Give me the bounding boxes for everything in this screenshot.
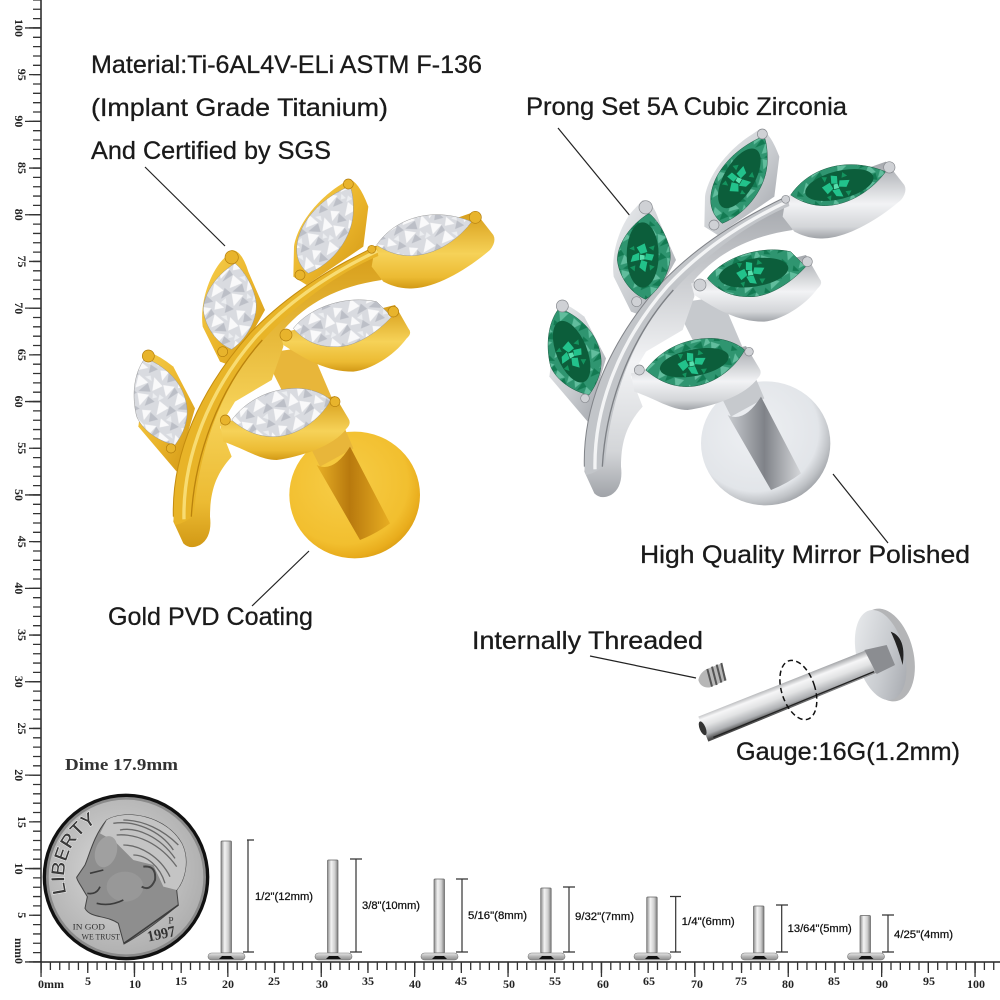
vertical ruler: 45 bbox=[15, 536, 29, 548]
material specification text: Material:Ti-6AL4V-ELi ASTM F-136 bbox=[91, 51, 482, 79]
silver left leaf settings bbox=[549, 129, 779, 422]
horizontal ruler: 15 bbox=[175, 974, 187, 988]
green marquise stones bbox=[548, 136, 886, 395]
threaded end bbox=[697, 720, 708, 736]
horizontal ruler bbox=[38, 962, 1000, 991]
labret post diagram bbox=[697, 602, 924, 742]
length sample 12mm: 1/2"(12mm) bbox=[255, 891, 313, 903]
horizontal ruler: 100 bbox=[967, 977, 985, 991]
horizontal ruler: 95 bbox=[923, 974, 935, 988]
vertical ruler: 55 bbox=[15, 442, 29, 454]
length sample 8mm bbox=[421, 879, 527, 960]
flat back disc bbox=[846, 602, 924, 708]
horizontal ruler: 70 bbox=[691, 977, 703, 991]
length sample 10mm: 3/8"(10mm) bbox=[362, 900, 420, 912]
liberty inscription bbox=[64, 823, 97, 893]
length sample 4mm: 4/25"(4mm) bbox=[894, 929, 953, 941]
threaded screw bbox=[698, 663, 727, 687]
gold leaf labret bbox=[134, 179, 494, 558]
leader line: threaded bbox=[590, 656, 696, 678]
silver ribbon behind stem bbox=[584, 197, 793, 497]
leader line: mirror polished bbox=[833, 474, 888, 543]
portrait bbox=[77, 815, 186, 944]
vertical ruler: 40 bbox=[12, 582, 26, 594]
collar bbox=[864, 645, 895, 674]
leader line: prong set bbox=[558, 128, 631, 217]
gold prongs bbox=[142, 179, 481, 453]
length sample 5mm: 13/64"(5mm) bbox=[788, 923, 852, 935]
length sample 8mm: 5/16"(8mm) bbox=[468, 910, 527, 922]
clear marquise stones bbox=[134, 186, 472, 445]
horizontal ruler: 0mm bbox=[38, 977, 64, 991]
vertical ruler: 15 bbox=[15, 816, 29, 828]
length sample 7mm: 9/32"(7mm) bbox=[575, 911, 634, 923]
horizontal ruler: 20 bbox=[222, 977, 234, 991]
vertical ruler: 10 bbox=[12, 863, 26, 875]
length sample 5mm bbox=[741, 905, 852, 960]
mirror polished label: High Quality Mirror Polished bbox=[640, 541, 970, 569]
mint mark: P bbox=[168, 916, 174, 926]
vertical ruler: 50 bbox=[12, 489, 26, 501]
horizontal ruler: 55 bbox=[549, 974, 561, 988]
material specification text bbox=[91, 51, 482, 165]
vertical ruler: 70 bbox=[12, 302, 26, 314]
dark stone centres bbox=[545, 142, 877, 388]
horizontal ruler: 25 bbox=[268, 974, 280, 988]
gold post bbox=[263, 347, 390, 540]
gold coating label: Gold PVD Coating bbox=[108, 603, 313, 631]
coin motto: WE TRUST bbox=[82, 932, 120, 941]
bright stone sparkles bbox=[554, 161, 853, 379]
vertical ruler: 20 bbox=[12, 769, 26, 781]
vertical ruler: 75 bbox=[15, 256, 29, 268]
horizontal ruler: 40 bbox=[409, 977, 421, 991]
horizontal ruler: 35 bbox=[362, 974, 374, 988]
horizontal ruler: 75 bbox=[735, 974, 747, 988]
dime caption: Dime 17.9mm bbox=[65, 755, 178, 774]
silver base disc bbox=[701, 381, 830, 505]
vertical ruler: 60 bbox=[12, 396, 26, 408]
vertical ruler: 90 bbox=[12, 115, 26, 127]
length sample 12mm bbox=[208, 840, 313, 960]
horizontal ruler: 80 bbox=[782, 977, 794, 991]
length sample 4mm bbox=[848, 915, 953, 960]
horizontal ruler: 10 bbox=[129, 977, 141, 991]
prong set label: Prong Set 5A Cubic Zirconia bbox=[526, 93, 847, 121]
material specification text: And Certified by SGS bbox=[91, 137, 331, 165]
vertical ruler: 100 bbox=[12, 19, 26, 37]
vertical ruler: mm0 bbox=[12, 938, 26, 964]
length sample 6mm: 1/4"(6mm) bbox=[682, 916, 735, 928]
gold right leaf settings bbox=[220, 212, 494, 460]
gold left leaf settings bbox=[138, 179, 368, 472]
vertical ruler: 65 bbox=[15, 349, 29, 361]
gauge dashed ring bbox=[773, 656, 824, 724]
material specification text: (Implant Grade Titanium) bbox=[91, 94, 388, 122]
vertical ruler: 85 bbox=[15, 162, 29, 174]
vertical ruler: 25 bbox=[15, 722, 29, 734]
horizontal ruler: 60 bbox=[597, 977, 609, 991]
coin motto: IN GOD bbox=[73, 922, 105, 931]
post shadow line bbox=[713, 672, 874, 737]
coin date: 1997 bbox=[146, 923, 177, 946]
vertical ruler bbox=[12, 0, 41, 964]
horizontal ruler: 50 bbox=[503, 977, 515, 991]
leader line: gold coating bbox=[252, 551, 309, 606]
silver right leaf settings bbox=[631, 162, 905, 410]
vertical ruler: 80 bbox=[12, 209, 26, 221]
coin motto bbox=[73, 922, 120, 941]
silver post bbox=[674, 297, 801, 490]
silver prongs bbox=[556, 129, 895, 403]
horizontal ruler: 90 bbox=[876, 977, 888, 991]
gold ribbon behind stem bbox=[173, 247, 382, 547]
dime coin bbox=[42, 794, 210, 960]
length sample 7mm bbox=[528, 887, 634, 960]
gold curved stem bbox=[173, 246, 378, 525]
horizontal ruler: 65 bbox=[643, 974, 655, 988]
silver leaf labret with green stones bbox=[545, 129, 905, 505]
gold base disc bbox=[289, 432, 420, 558]
post tube bbox=[698, 651, 877, 742]
gauge label: Gauge:16G(1.2mm) bbox=[736, 738, 960, 766]
internally threaded label: Internally Threaded bbox=[472, 627, 703, 655]
silver curved stem bbox=[584, 196, 789, 475]
length sample 10mm bbox=[315, 859, 420, 960]
vertical ruler: 35 bbox=[15, 629, 29, 641]
horizontal ruler: 30 bbox=[316, 977, 328, 991]
vertical ruler: 5 bbox=[15, 912, 29, 918]
length sample 6mm bbox=[634, 896, 735, 960]
horizontal ruler: 5 bbox=[85, 974, 91, 988]
vertical ruler: 95 bbox=[15, 69, 29, 81]
dime coin: LIBERTY bbox=[50, 810, 93, 895]
vertical ruler: 30 bbox=[12, 676, 26, 688]
horizontal ruler: 45 bbox=[455, 974, 467, 988]
leader line: material to gold piece bbox=[145, 167, 225, 246]
horizontal ruler: 85 bbox=[828, 974, 840, 988]
